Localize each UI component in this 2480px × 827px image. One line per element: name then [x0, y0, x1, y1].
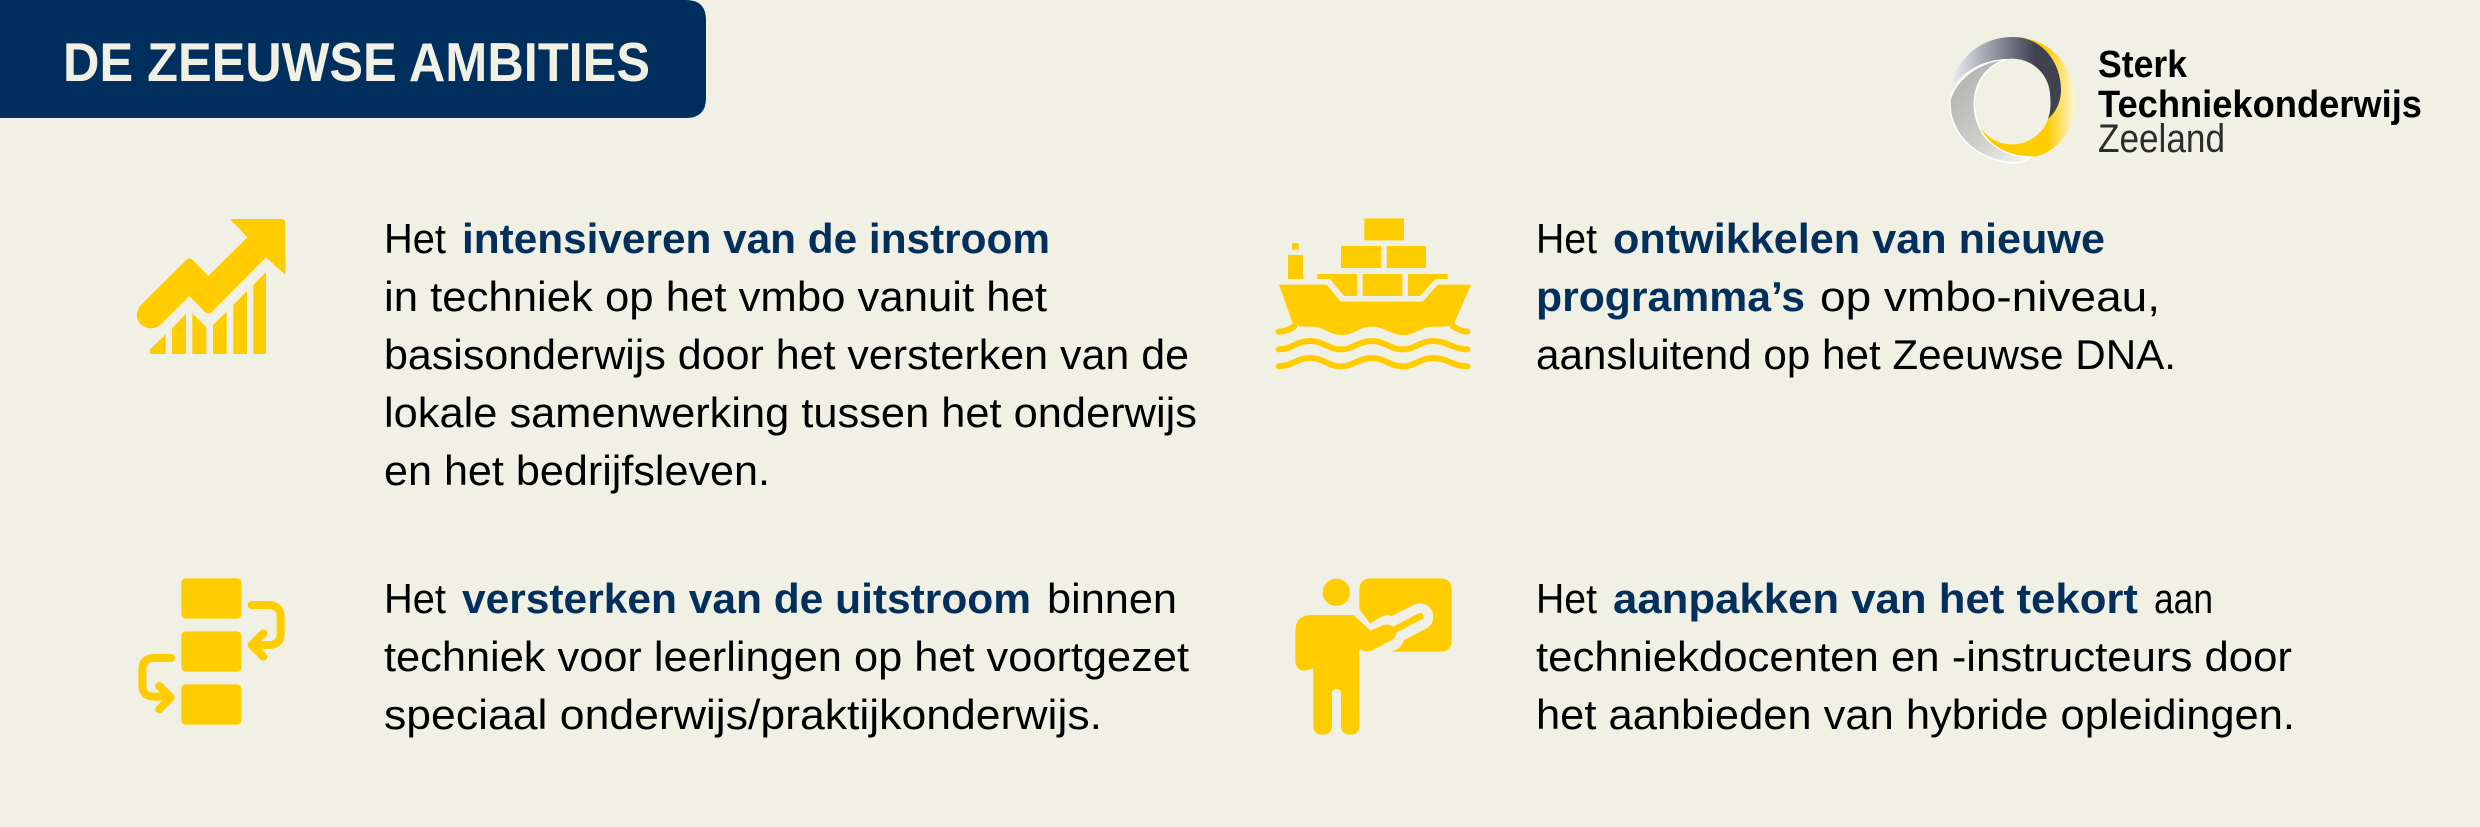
logo: Sterk Techniekonderwijs Zeeland	[1949, 37, 2422, 163]
icon: rising arrow chart	[137, 219, 285, 354]
text block: tekort: aan	[2154, 575, 2213, 622]
text block: instroom	[384, 215, 1197, 494]
title banner	[0, 0, 706, 118]
text block: instroom: en het bedrijfsleven.	[384, 447, 770, 494]
logo ring	[1949, 37, 2075, 163]
text block: tekort: het aanbieden van hybride opleidingen.	[1536, 691, 2295, 738]
text block: nieuwe programma's: op vmbo-niveau,	[1820, 273, 2160, 320]
text block: uitstroom: binnen	[1047, 575, 1177, 622]
text block: nieuwe programma's: programma’s	[1536, 273, 1805, 320]
text block: tekort: techniekdocenten en -instructeurs door	[1536, 633, 2292, 680]
logo text	[2098, 44, 2422, 161]
text block: tekort	[1536, 575, 2295, 738]
text block: uitstroom: versterken van de uitstroom	[462, 575, 1031, 622]
title: DE ZEEUWSE AMBITIES	[63, 31, 650, 93]
text block: nieuwe programma's: Het	[1536, 215, 1597, 262]
text block: uitstroom: speciaal onderwijs/praktijkonderwijs.	[384, 691, 1102, 738]
text block: instroom: Het	[384, 215, 446, 262]
icon: container ship	[1279, 218, 1471, 366]
text block: instroom: lokale samenwerking tussen het onderwijs	[384, 389, 1197, 436]
text block: instroom: in techniek op het vmbo vanuit het	[384, 273, 1047, 320]
text block: uitstroom: Het	[384, 575, 446, 622]
text block: tekort: aanpakken van het tekort	[1613, 575, 2138, 622]
text block: nieuwe programma's: ontwikkelen van nieuwe	[1613, 215, 2105, 262]
logo text: Techniekonderwijs	[2098, 84, 2422, 126]
logo text: Sterk	[2098, 44, 2188, 86]
text block: nieuwe programma's	[1536, 215, 2176, 378]
text block: instroom: basisonderwijs door het versterken van de	[384, 331, 1189, 378]
text block: nieuwe programma's: aansluitend op het Zeeuwse DNA.	[1536, 331, 2176, 378]
text block: uitstroom: techniek voor leerlingen op het voortgezet	[384, 633, 1189, 680]
text block: instroom: intensiveren van de instroom	[462, 215, 1050, 262]
logo text: Zeeland	[2098, 117, 2225, 161]
text block: uitstroom	[384, 575, 1189, 738]
icon: teacher at board	[1295, 578, 1452, 735]
text block: tekort: Het	[1536, 575, 1597, 622]
icon: flow blocks with arrows	[142, 578, 281, 725]
